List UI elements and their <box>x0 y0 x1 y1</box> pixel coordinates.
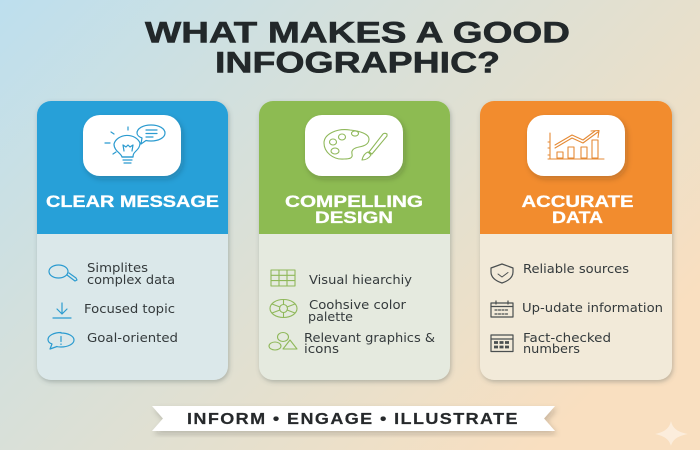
heading: DATA <box>552 209 603 227</box>
panel: accurate data <box>480 101 672 380</box>
icon: download arrow <box>53 303 71 318</box>
text: cohesive colour palette: Coohsive color <box>309 298 406 312</box>
text: reliable sources: Reliable sources <box>523 262 629 276</box>
text: goal-oriented: Goal-oriented <box>87 331 178 345</box>
icon: shield <box>491 264 513 283</box>
icon: calendar <box>491 301 513 317</box>
icon: grid <box>271 270 295 286</box>
text: simplifies: Simplites <box>87 261 148 275</box>
text: cohesive colour palette: palette <box>308 310 353 324</box>
panel: compelling design <box>259 101 450 380</box>
icon: colour wheel <box>270 300 297 318</box>
text: fact-checked numbers: numbers <box>523 342 580 356</box>
icon: shapes <box>269 332 297 350</box>
banner: INFORM • ENGAGE • ILLUSTRATE <box>187 411 519 428</box>
text: simplifies: complex data <box>87 273 175 287</box>
icon: data table <box>491 335 513 352</box>
text: fact-checked numbers: Fact-checked <box>523 331 611 345</box>
heading: ACCURATE <box>522 193 634 211</box>
text: relevant graphics: icons <box>304 342 339 356</box>
icon: magnifier <box>49 265 77 281</box>
heading <box>522 193 634 227</box>
heading: CLEAR MESSAGE <box>46 193 219 211</box>
title <box>145 16 570 80</box>
heading: COMPELLING <box>285 193 423 211</box>
heading: DESIGN <box>315 209 393 227</box>
title: WHAT MAKES A GOOD <box>145 16 570 50</box>
icon: paint palette <box>305 115 403 176</box>
icon: sparkle <box>655 421 688 446</box>
title: INFOGRAPHIC? <box>215 46 500 80</box>
panel: clear message <box>37 101 228 380</box>
icon: bar chart with arrow <box>527 115 625 176</box>
heading <box>285 193 423 227</box>
text: visual hierarchy: Visual hiearchiy <box>309 273 412 287</box>
icon: alert speech bubble <box>48 332 74 349</box>
icon: light bulb with speech bubble <box>83 115 181 176</box>
text: up-to-date information: Up-udate information <box>522 301 663 315</box>
banner <box>152 406 555 431</box>
text: focused topic: Focused topic <box>84 302 175 316</box>
text: relevant graphics: Relevant graphics & <box>304 331 435 345</box>
